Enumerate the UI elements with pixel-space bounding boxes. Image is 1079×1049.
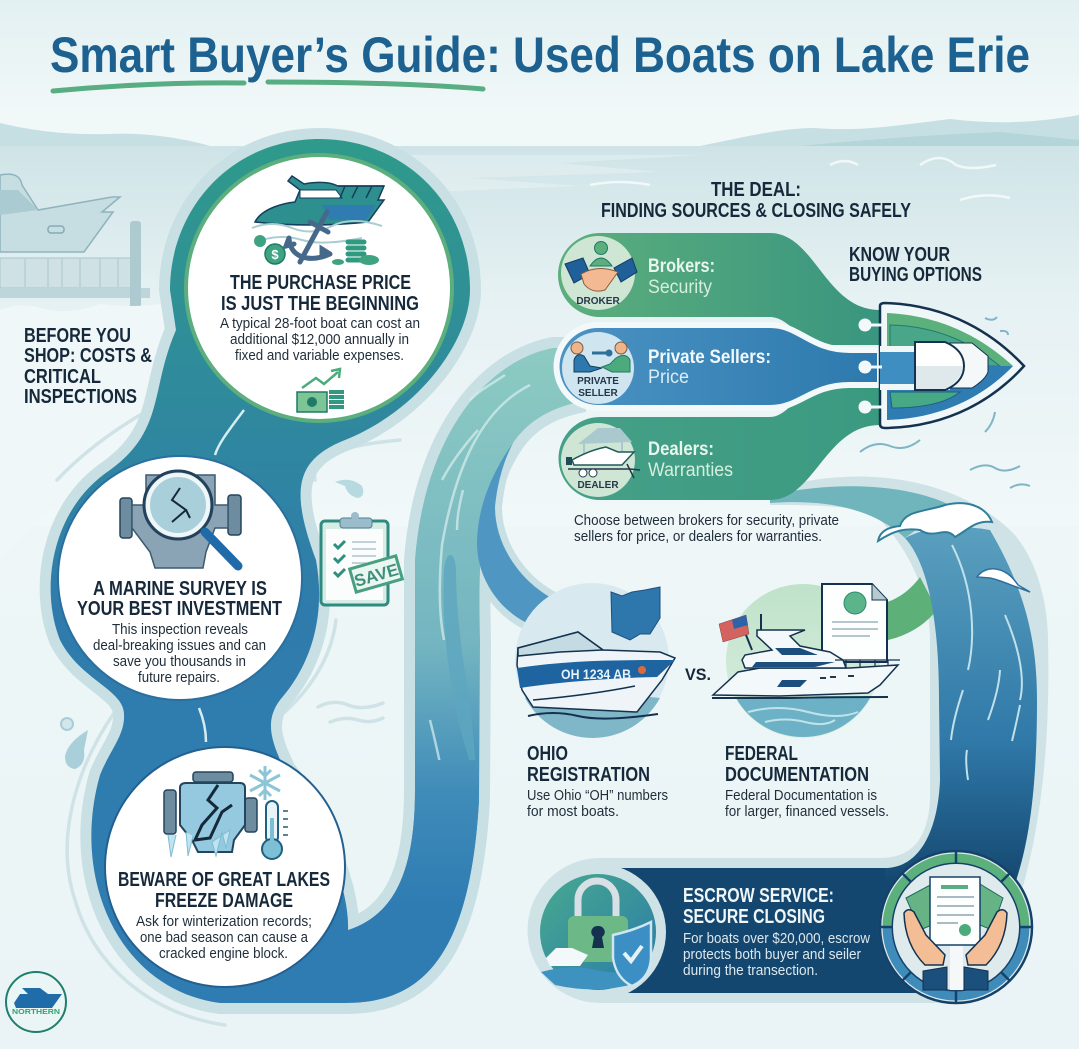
logo: northern boats: NORTHERN xyxy=(12,1007,60,1016)
text: choose between xyxy=(574,512,839,545)
option: private sellers: Price xyxy=(648,367,689,388)
body text xyxy=(725,787,889,820)
decorative water drops xyxy=(61,480,363,769)
icon: yacht with document and flag xyxy=(712,584,900,738)
body text: during the transection. xyxy=(683,962,818,979)
body text: deal-breaking issues and can xyxy=(93,637,266,654)
icon: snowflake xyxy=(250,766,280,800)
icon: ohio boat illustration xyxy=(515,583,675,738)
option: dealers: DEALER xyxy=(577,480,619,491)
option: brokers xyxy=(558,233,880,345)
icon: money with growth arrow xyxy=(297,369,344,412)
label: know your buying options: KNOW YOUR xyxy=(849,244,950,266)
body text: This inspection reveals xyxy=(112,621,248,638)
panel: purchase price xyxy=(186,155,452,421)
panel: ohio registration xyxy=(515,583,675,820)
heading: SECURE CLOSING xyxy=(683,906,825,928)
panel: federal documentation xyxy=(712,584,900,820)
heading xyxy=(118,869,330,912)
right wave back band xyxy=(770,477,1048,900)
label: know your buying options: BUYING OPTIONS xyxy=(849,264,982,286)
body text: cracked engine block. xyxy=(159,945,288,962)
heading xyxy=(725,743,869,786)
option: dealers xyxy=(558,385,880,500)
icon: boat with anchor and coins: $ xyxy=(271,247,279,262)
heading: FREEZE DAMAGE xyxy=(155,890,293,912)
body text: one bad season can cause a xyxy=(140,929,309,946)
label: know your buying options xyxy=(849,244,982,286)
heading: A MARINE SURVEY IS xyxy=(93,578,267,600)
icon: boat from above xyxy=(858,303,1030,488)
option: brokers: Brokers: xyxy=(648,256,715,277)
heading xyxy=(221,272,419,315)
body text: For boats over $20,000, escrow xyxy=(683,930,870,947)
green arc behind federal document xyxy=(887,577,937,640)
heading: REGISTRATION xyxy=(527,764,650,786)
heading: ESCROW SERVICE: xyxy=(683,885,834,907)
heading: YOUR BEST INVESTMENT xyxy=(77,598,282,620)
section label: before you shop xyxy=(24,325,152,408)
body text: protects both buyer and seiler xyxy=(683,946,861,963)
section label: before you shop: INSPECTIONS xyxy=(24,386,137,408)
option: dealers: Warranties xyxy=(648,460,733,481)
body text xyxy=(683,930,870,979)
background boat and dock xyxy=(0,174,185,560)
body text: fixed and variable expenses. xyxy=(235,347,404,364)
section label: before you shop: CRITICAL xyxy=(24,366,101,388)
option: brokers: DROKER xyxy=(576,296,620,307)
panel: buying options xyxy=(557,233,1030,500)
panel: freeze damage xyxy=(105,747,345,987)
heading xyxy=(77,578,282,620)
option: private sellers: SELLER xyxy=(578,388,618,399)
heading xyxy=(683,885,834,928)
body text: A typical 28-foot boat can cost an xyxy=(220,315,420,332)
icon: boat with anchor and coins xyxy=(252,176,384,265)
right section heading: FINDING SOURCES & CLOSING SAFELY xyxy=(601,200,912,222)
label: vs: VS. xyxy=(685,665,711,684)
body text xyxy=(527,787,668,820)
section label: before you shop: SHOP: COSTS & xyxy=(24,345,152,367)
icon: frozen cracked engine xyxy=(164,772,257,857)
body text xyxy=(93,621,266,686)
icon: clipboard with save stamp xyxy=(321,512,402,605)
body text: save you thousands in xyxy=(113,653,246,670)
section label: before you shop: BEFORE YOU xyxy=(24,325,131,347)
body text: Ask for winterization records; xyxy=(136,913,312,930)
icon: padlock and shield xyxy=(530,864,666,1000)
heading: OHIO xyxy=(527,743,568,765)
body text: Use Ohio “OH” numbers xyxy=(527,787,668,804)
heading: DOCUMENTATION xyxy=(725,764,869,786)
icon: engine under magnifier xyxy=(120,471,241,568)
body text: for most boats. xyxy=(527,803,619,820)
logo: northern boats xyxy=(6,972,66,1032)
body text: for larger, financed vessels. xyxy=(725,803,889,820)
icon: hands holding contract wheel xyxy=(880,851,1032,1003)
text: choose between: sellers for price, or dealers for warranties. xyxy=(574,528,822,545)
body text xyxy=(136,913,312,962)
icon: ohio boat illustration: OH 1234 AB xyxy=(561,666,631,682)
left blue and teal circle chain xyxy=(51,139,479,1003)
right section heading xyxy=(601,179,912,222)
option: dealers: Dealers: xyxy=(648,439,714,460)
option: brokers: Security xyxy=(648,277,712,298)
heading: BEWARE OF GREAT LAKES xyxy=(118,869,330,891)
option: private sellers: Private Sellers: xyxy=(648,347,771,368)
body text: Federal Documentation is xyxy=(725,787,877,804)
winding river right of the circles xyxy=(300,348,575,1003)
panel: marine survey xyxy=(58,456,302,700)
heading: THE PURCHASE PRICE xyxy=(230,272,411,294)
background: lake and hills xyxy=(0,115,1079,526)
escrow content xyxy=(530,851,1032,1003)
panel: escrow service bar xyxy=(528,800,965,1003)
heading: FEDERAL xyxy=(725,743,798,765)
right wave and river xyxy=(878,503,1037,920)
decorative water arcs around the circle chain xyxy=(57,415,400,1025)
icon: clipboard with save stamp: SAVE xyxy=(352,560,401,591)
heading xyxy=(527,743,650,786)
body text: future repairs. xyxy=(138,669,220,686)
text: choose between: Choose between brokers for security, private xyxy=(574,512,839,529)
option: private sellers xyxy=(557,325,880,408)
body text xyxy=(220,315,420,364)
icon: thermometer xyxy=(262,801,288,859)
right section heading: THE DEAL: xyxy=(711,179,801,201)
heading: IS JUST THE BEGINNING xyxy=(221,293,419,315)
option: private sellers: PRIVATE xyxy=(577,376,619,387)
body text: additional $12,000 annually in xyxy=(230,331,409,348)
